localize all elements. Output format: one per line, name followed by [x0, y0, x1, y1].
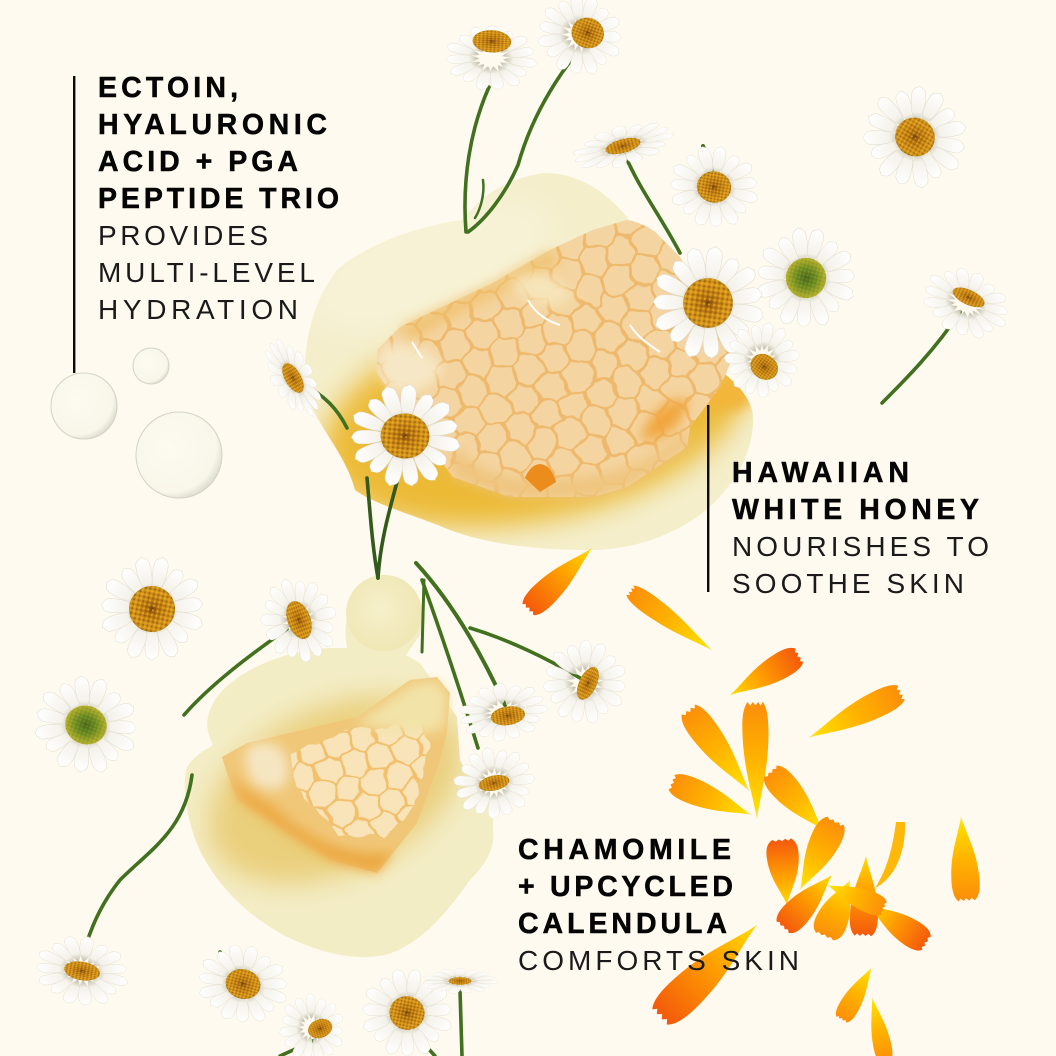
text block: chamomile: COMFORTS SKIN — [518, 945, 799, 976]
text block: ectoin: ACID + PGA — [98, 146, 298, 178]
text block: honey: HAWAIIAN — [732, 457, 909, 489]
petal — [810, 873, 865, 943]
upper honey puddle — [305, 173, 754, 550]
petal — [742, 702, 770, 820]
petal — [849, 856, 880, 936]
vertical rule: hydration — [73, 76, 75, 373]
petal right — [947, 815, 981, 902]
flower: foreshortened — [249, 566, 350, 674]
flower: bottom stem head — [422, 968, 498, 994]
text block: chamomile: CHAMOMILE — [518, 834, 731, 866]
water drops — [51, 348, 222, 498]
flower: bottom left — [29, 928, 135, 1014]
petal — [861, 894, 934, 955]
petal — [833, 962, 881, 1025]
flower: bottom partial — [269, 984, 355, 1056]
petal — [773, 865, 842, 937]
flower: upper right — [844, 67, 987, 208]
flower: puddle edge — [446, 739, 542, 827]
petal — [624, 582, 719, 659]
text block: ectoin: ECTOIN, — [98, 72, 238, 104]
text block: honey — [732, 457, 989, 599]
flower: bottom centre — [352, 960, 462, 1056]
petal — [787, 814, 849, 897]
text block: ectoin: PEPTIDE TRIO — [98, 183, 339, 215]
flower: bottom — [188, 934, 299, 1034]
honey droplet — [346, 575, 422, 651]
text block: chamomile: CALENDULA — [518, 908, 727, 940]
text block: chamomile: + UPCYCLED — [518, 871, 733, 903]
flower: right of stems — [529, 626, 642, 739]
text block: ectoin: HYDRATION — [98, 294, 298, 325]
petal — [666, 770, 757, 827]
flower: side view — [454, 677, 553, 747]
flower: top left — [443, 23, 540, 94]
petal — [723, 644, 806, 706]
petal curved — [875, 822, 905, 888]
flower: mid left — [89, 546, 215, 672]
chamomile stems — [83, 55, 960, 1056]
text block: honey: WHITE HONEY — [732, 494, 979, 526]
flower: left of puddle — [253, 330, 333, 427]
lower honeycomb — [222, 677, 450, 873]
flower: upper middle — [662, 138, 766, 236]
petal — [677, 701, 761, 800]
petal — [765, 838, 803, 906]
text block: chamomile — [518, 834, 799, 976]
petal large bottom — [647, 912, 769, 1030]
flower: top — [526, 0, 635, 88]
lower honey puddle — [184, 575, 494, 958]
flower: far right — [911, 254, 1022, 352]
text block: honey: NOURISHES TO — [732, 531, 989, 562]
petal — [760, 762, 833, 839]
flower: on honeycomb — [644, 238, 773, 368]
petal — [823, 875, 889, 918]
text block: ectoin: MULTI-LEVEL — [98, 257, 315, 288]
calendula petals — [519, 539, 981, 1056]
vertical rule: honey — [707, 405, 709, 592]
flower: comb edge — [709, 307, 815, 414]
flower: lower left on puddle — [345, 379, 466, 493]
flower: stem side — [567, 113, 680, 179]
petal — [802, 681, 907, 750]
petal — [863, 995, 895, 1056]
text block: ectoin: PROVIDES — [98, 220, 268, 251]
flower: green centre left — [20, 661, 153, 789]
petal — [519, 539, 601, 619]
text block: ectoin: HYALURONIC — [98, 109, 327, 141]
text block: ectoin — [98, 72, 339, 325]
flower: green centre right — [744, 216, 869, 341]
text block: honey: SOOTHE SKIN — [732, 568, 964, 599]
upper honeycomb — [370, 215, 740, 505]
